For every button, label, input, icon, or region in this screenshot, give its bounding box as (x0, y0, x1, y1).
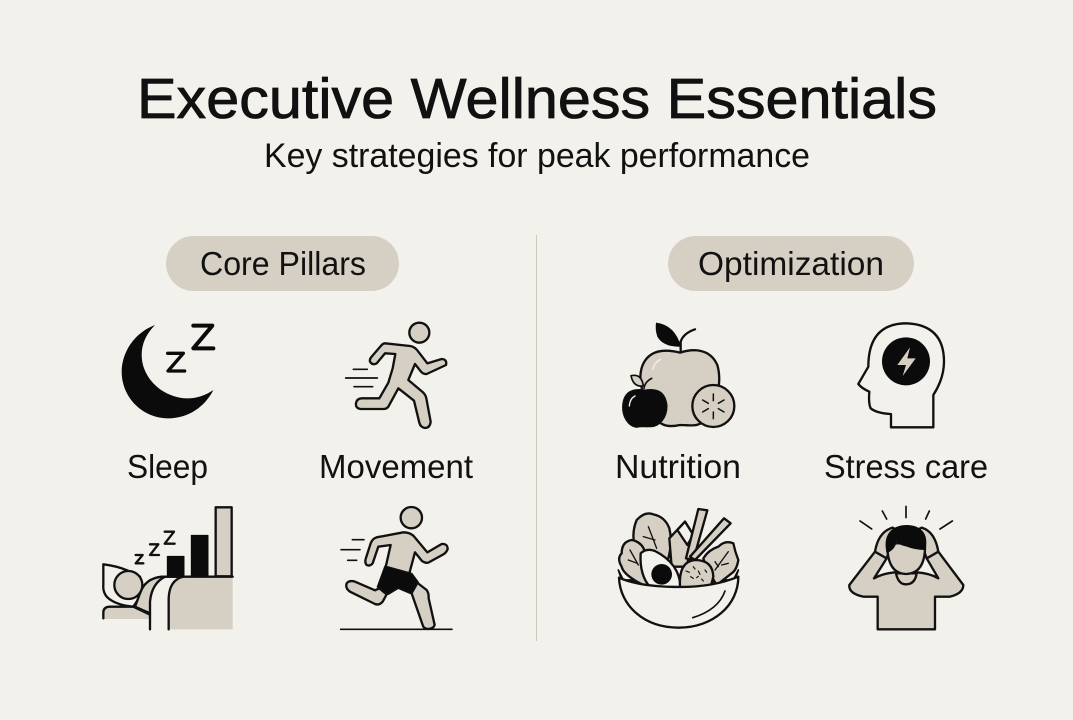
label: Movement: Movement (319, 448, 473, 485)
icon: runner with shorts on ground line (341, 507, 452, 629)
icon: head with lightning bolt (858, 323, 944, 427)
icon: moon with z letters (122, 325, 213, 418)
pill: Optimization: Optimization (698, 245, 884, 282)
icon: salad bowl (618, 509, 738, 628)
label: Sleep: Sleep (127, 448, 208, 485)
subtitle: Key strategies for peak performance (264, 137, 810, 175)
icon: stressed person holding head (849, 506, 963, 629)
icon: apple group with fruit slice (623, 323, 734, 427)
label: Nutrition: Nutrition (615, 448, 741, 485)
pill: Core Pillars: Core Pillars (200, 245, 366, 282)
icon: sleeper in bed with rising bars (103, 507, 233, 629)
title: Executive Wellness Essentials (137, 67, 937, 131)
icon: running figure with speed lines (346, 323, 446, 428)
pill: Core Pillars (166, 236, 399, 291)
label: Stress care: Stress care (824, 448, 988, 485)
pill: Optimization (668, 236, 914, 291)
